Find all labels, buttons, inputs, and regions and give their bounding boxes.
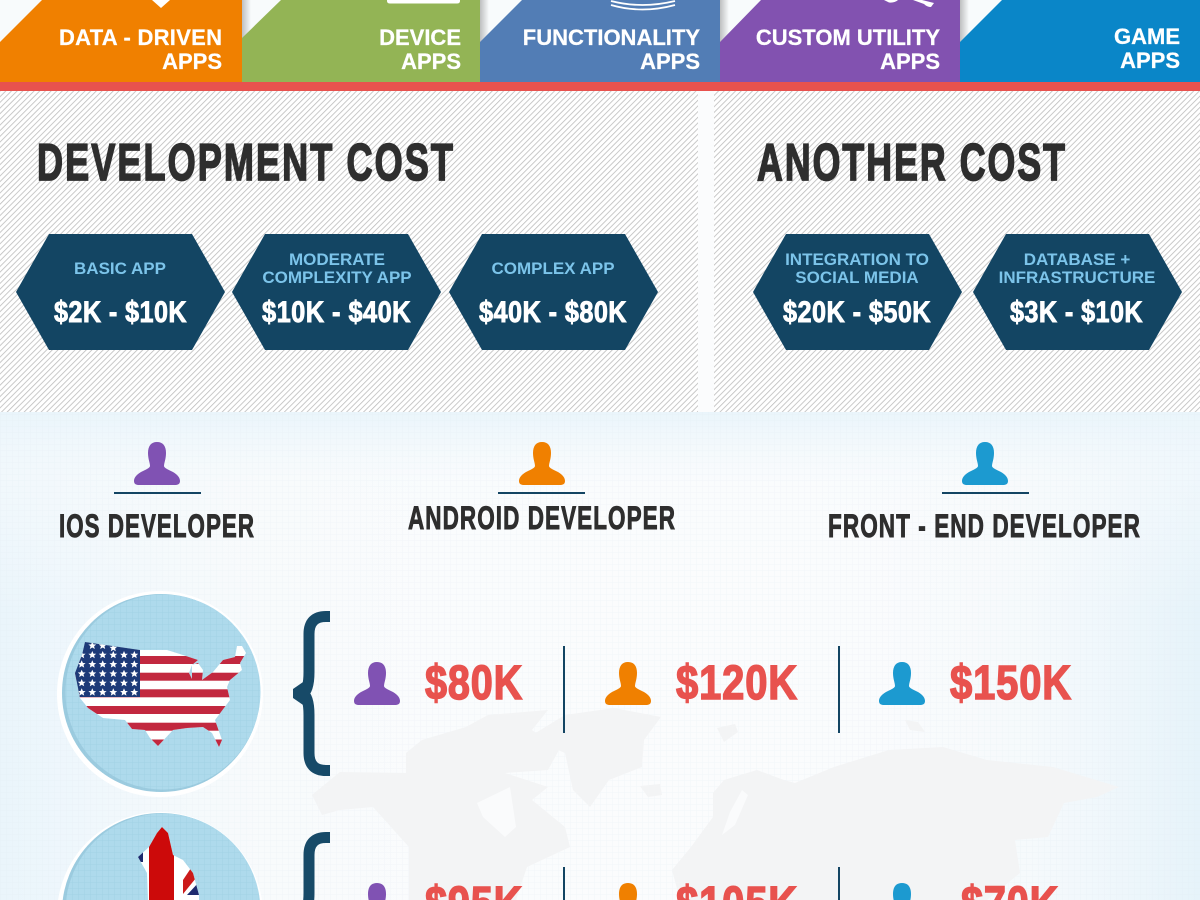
brace: UK row <box>303 838 334 900</box>
tab: custom utility apps: APPS <box>880 49 940 74</box>
hexagon: integration to social media: $20K - $50K <box>783 296 931 329</box>
tab: custom utility apps: CUSTOM UTILITY <box>756 25 940 50</box>
tab: data-driven apps: APPS <box>162 49 222 74</box>
hexagon: basic app: BASIC APP <box>74 259 166 278</box>
front-end salary UK <box>879 878 1059 900</box>
tab: device apps: APPS <box>401 49 461 74</box>
Android salary UK <box>605 878 798 900</box>
tab: functionality apps: FUNCTIONALITY <box>523 25 700 50</box>
iOS salary USA: $80K <box>425 657 523 710</box>
tab: functionality apps: APPS <box>640 49 700 74</box>
hexagon: database and infrastructure <box>973 234 1182 350</box>
hexagon: database and infrastructure: DATABASE + <box>1024 250 1130 269</box>
legend: front-end developer <box>828 442 1141 544</box>
heading: development cost: DEVELOPMENT COST <box>37 134 455 192</box>
UK salaries row <box>354 867 1059 900</box>
category tabs <box>0 0 1200 82</box>
USA salaries row <box>354 646 1072 733</box>
hexagon: integration to social media <box>753 234 962 350</box>
tab: game apps <box>960 0 1200 82</box>
panel: another cost <box>714 91 1200 412</box>
tab: data-driven apps: DATA - DRIVEN <box>59 25 222 50</box>
hexagon: moderate complexity app <box>232 234 441 350</box>
hexagon: database and infrastructure: INFRASTRUCTURE <box>999 268 1155 287</box>
hexagon: integration to social media: SOCIAL MEDIA <box>795 268 919 287</box>
tab: game apps: APPS <box>1120 48 1180 73</box>
brace: USA row <box>293 616 334 770</box>
legend: Android developer <box>408 442 676 536</box>
hexagon: database and infrastructure: $3K - $10K <box>1010 296 1143 329</box>
Android salary USA: $120K <box>676 657 798 710</box>
tab: data-driven apps <box>0 0 242 82</box>
hexagon: moderate complexity app: COMPLEXITY APP <box>262 268 412 287</box>
tab: device apps <box>242 0 480 82</box>
badge: UK flag map <box>57 812 263 900</box>
front-end salary USA: $150K <box>950 657 1072 710</box>
legend: iOS developer <box>59 442 255 544</box>
hexagon: basic app: $2K - $10K <box>54 296 187 329</box>
legend: iOS developer: IOS DEVELOPER <box>59 508 255 544</box>
panel: development cost <box>0 91 698 412</box>
red divider bar <box>0 82 1200 91</box>
legend: Android developer: ANDROID DEVELOPER <box>408 500 676 536</box>
world map backdrop <box>312 708 1119 900</box>
hexagon: moderate complexity app: $10K - $40K <box>262 296 411 329</box>
hexagon: basic app <box>16 234 225 350</box>
front-end salary USA <box>879 657 1072 710</box>
hexagon: complex app <box>449 234 658 350</box>
tab: custom utility apps <box>720 0 960 82</box>
iOS salary UK <box>354 878 523 900</box>
hexagon: integration to social media: INTEGRATION TO <box>785 250 929 269</box>
heading: another cost: ANOTHER COST <box>757 134 1067 192</box>
tab: device apps: DEVICE <box>379 25 461 50</box>
hexagon: complex app: $40K - $80K <box>479 296 627 329</box>
tab: game apps: GAME <box>1114 24 1180 49</box>
tab: functionality apps <box>480 0 720 82</box>
iOS salary USA <box>354 657 523 710</box>
hexagon: complex app: COMPLEX APP <box>491 259 615 278</box>
hexagon: moderate complexity app: MODERATE <box>289 250 385 269</box>
Android salary USA <box>605 657 798 710</box>
badge: USA flag map <box>57 591 263 797</box>
